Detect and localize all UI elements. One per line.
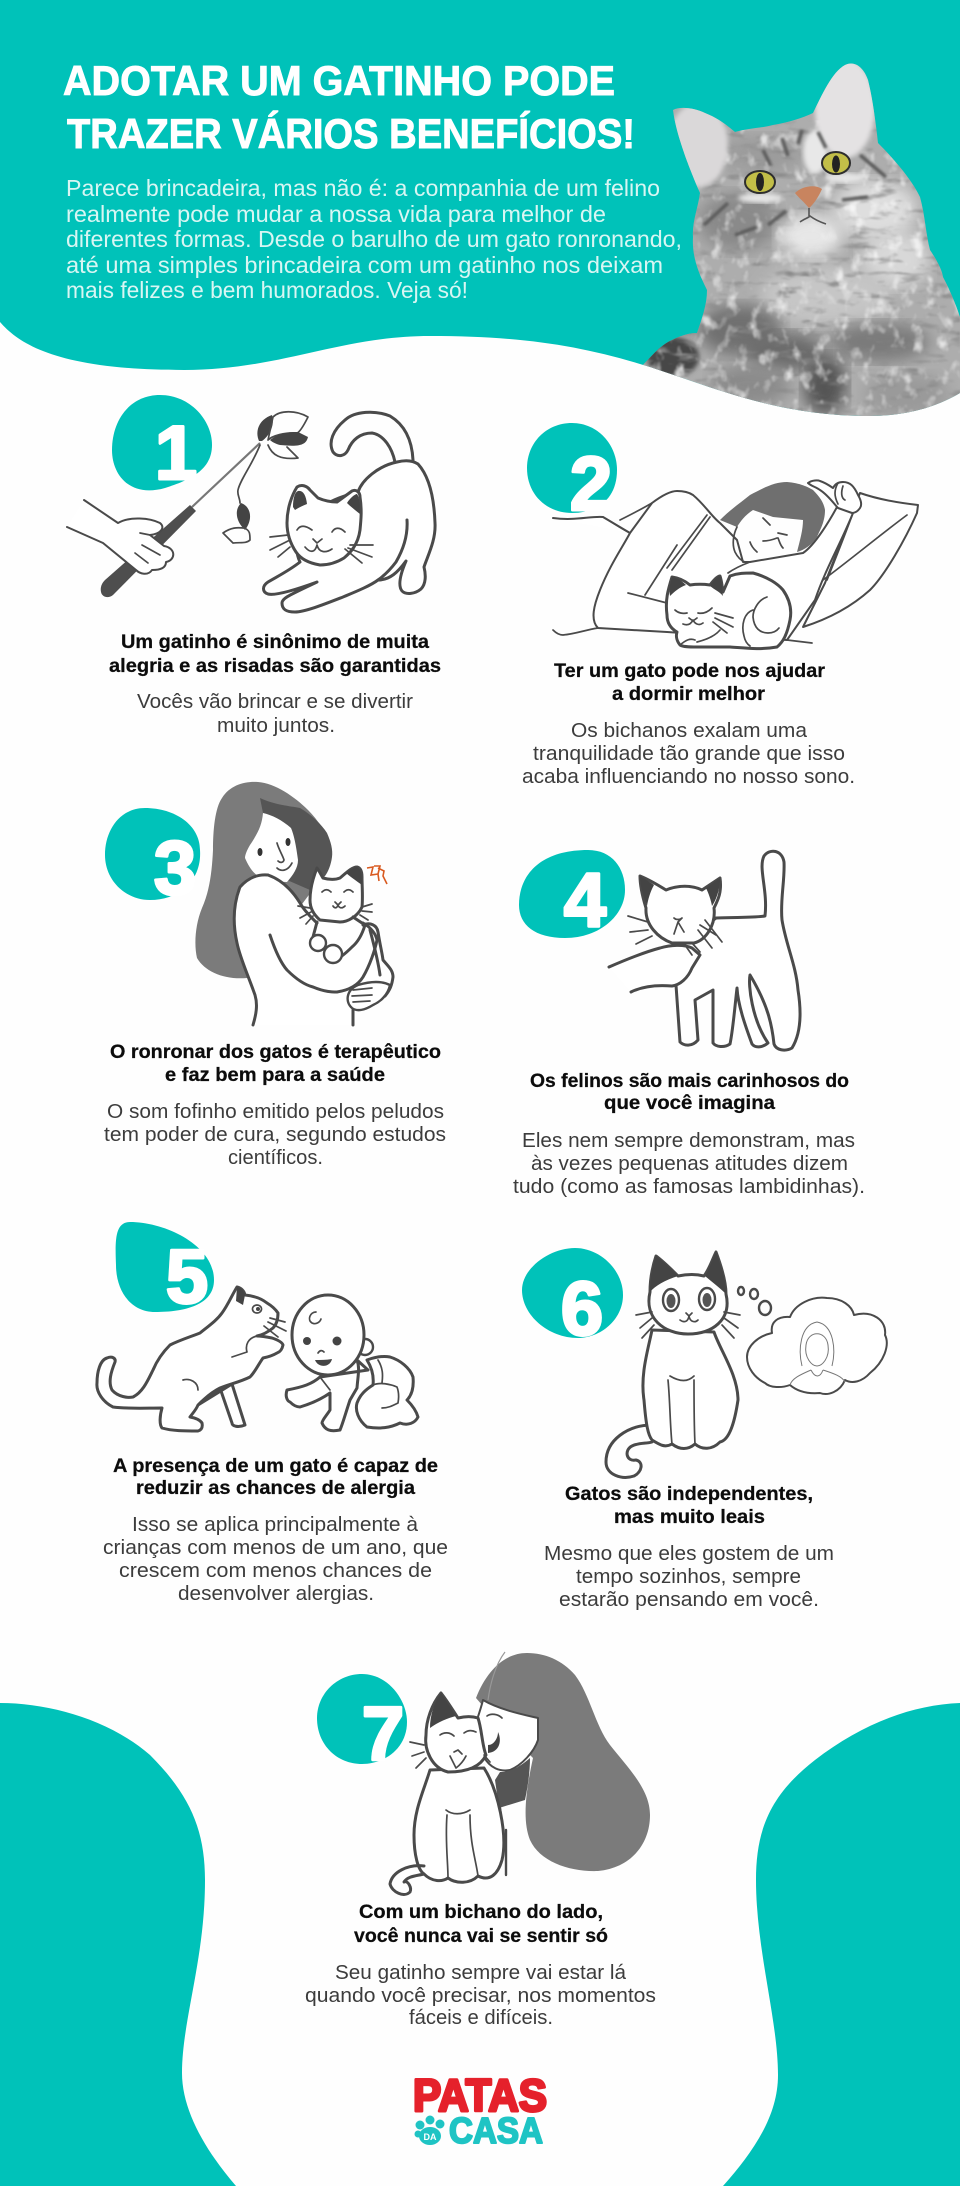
text 5: crianças com menos de um ano, que: [103, 1537, 448, 1559]
heading 4: [530, 1070, 849, 1114]
text 7: Seu gatinho sempre vai estar lá: [335, 1962, 627, 1984]
number blob 3: [105, 808, 200, 911]
body: [234, 875, 392, 1025]
heading 1: [109, 631, 441, 677]
cat body: [264, 461, 435, 612]
text 2: Os bichanos exalam uma: [571, 720, 808, 742]
illustration: hand with feather toy and playing cat: [67, 412, 435, 612]
title: TRAZER VÁRIOS BENEFÍCIOS!: [67, 110, 635, 157]
panel: benefit 2: [522, 423, 918, 788]
sleeping cat: [666, 573, 791, 649]
text 7: [305, 1962, 656, 2029]
long hair: [195, 782, 331, 978]
logo: Patas da Casa: CASA: [449, 2110, 543, 2151]
cat photo: [640, 50, 960, 430]
text 5: desenvolver alergias.: [178, 1583, 374, 1605]
illustration: hand petting cat: [609, 851, 800, 1050]
number blob 5: [116, 1222, 214, 1320]
text 1: Vocês vão brincar e se divertir: [137, 691, 413, 713]
icon: paw: DA: [424, 2132, 437, 2142]
heading 7: você nunca vai se sentir só: [354, 1925, 608, 1947]
intro text: realmente pode mudar a nossa vida para melhor de: [66, 201, 606, 227]
text 3: [104, 1101, 446, 1169]
intro text: [66, 175, 682, 303]
number blob 4: [519, 850, 625, 943]
heading 5: [113, 1455, 438, 1499]
red lines: [367, 866, 387, 884]
heading 4: que você imagina: [604, 1092, 775, 1114]
baby: [286, 1360, 368, 1431]
face: [733, 518, 787, 562]
woman in cloud: [790, 1322, 845, 1385]
text 4: [513, 1130, 865, 1198]
panel: benefit 7: [305, 1652, 656, 2029]
heading 2: a dormir melhor: [612, 683, 765, 705]
text 6: tempo sozinhos, sempre: [576, 1566, 801, 1588]
heading 6: mas muito leais: [614, 1506, 765, 1528]
cat head: [287, 486, 361, 565]
text 6: [544, 1543, 834, 1611]
panel: benefit 3: [104, 782, 446, 1169]
text 6: Mesmo que eles gostem de um: [544, 1543, 834, 1565]
footer side panel left: [0, 1703, 236, 2186]
right arm and hand: [363, 924, 393, 996]
text 1: muito juntos.: [217, 715, 335, 737]
heading 5: A presença de um gato é capaz de: [113, 1455, 438, 1477]
raised arm: [808, 480, 861, 513]
text 3: científicos.: [228, 1147, 323, 1169]
heading 3: [110, 1041, 441, 1086]
text 2: tranquilidade tão grande que isso: [533, 743, 845, 765]
text 5: [103, 1514, 448, 1605]
illustration: woman sleeping with cat: [553, 480, 918, 649]
text 3: O som fofinho emitido pelos peludos: [107, 1101, 444, 1123]
panel: benefit 6: [522, 1248, 887, 1611]
cat tail: [331, 412, 413, 462]
heading 7: Com um bichano do lado,: [359, 1901, 603, 1923]
illustration: woman cuddling cat: [390, 1652, 650, 1894]
face: [245, 813, 298, 882]
heading 1: Um gatinho é sinônimo de muita: [121, 631, 429, 653]
pillow: [803, 493, 918, 627]
heading 6: Gatos são independentes,: [565, 1483, 813, 1505]
illustration: sitting cat thinking of owner: [606, 1252, 887, 1477]
heading 4: Os felinos são mais carinhosos do: [530, 1070, 849, 1092]
text 4: tudo (como as famosas lambidinhas).: [513, 1176, 865, 1198]
heading 3: O ronronar dos gatos é terapêutico: [110, 1041, 441, 1063]
text 5: crescem com menos chances de: [119, 1560, 432, 1582]
title: ADOTAR UM GATINHO PODE: [63, 57, 615, 104]
cat in arms: [310, 867, 362, 922]
heading 2: [554, 660, 825, 705]
text 4: Eles nem sempre demonstram, mas: [522, 1130, 855, 1152]
illustration: woman hugging cat: [195, 782, 393, 1025]
number blob 1: 1: [155, 411, 197, 496]
heading 1: alegria e as risadas são garantidas: [109, 655, 441, 677]
number blob 7: [317, 1674, 407, 1777]
heading 7: [354, 1901, 608, 1947]
panel: benefit 1: [67, 395, 441, 737]
illustration: cat and crawling baby: [97, 1287, 418, 1431]
cat head: [640, 876, 721, 943]
heading 5: reduzir as chances de alergia: [136, 1477, 415, 1499]
arm and body: [553, 491, 853, 640]
number blob 6: 6: [561, 1267, 603, 1352]
logo: Patas da Casa: [413, 2070, 547, 2151]
number blob 1: [112, 395, 212, 496]
panel: benefit 4: [513, 850, 865, 1198]
hand: [609, 945, 700, 992]
title: [63, 57, 635, 157]
text 7: quando você precisar, nos momentos: [305, 1985, 656, 2007]
heading 2: Ter um gato pode nos ajudar: [554, 660, 825, 682]
text 1: [137, 691, 413, 737]
intro text: até uma simples brincadeira com um gatinho nos deixam: [66, 252, 663, 278]
text 2: acaba influenciando no nosso sono.: [522, 766, 855, 788]
logo: Patas da Casa: PATAS: [413, 2070, 547, 2121]
number blob 7: 7: [362, 1692, 404, 1777]
text 2: [522, 720, 855, 788]
heading 6: [565, 1483, 813, 1528]
number blob 6: [522, 1248, 623, 1352]
text 3: tem poder de cura, segundo estudos: [104, 1124, 446, 1146]
text 6: estarão pensando em você.: [559, 1589, 819, 1611]
header wave panel: [0, 0, 960, 416]
text 7: fáceis e difíceis.: [409, 2007, 553, 2029]
cat: [198, 1384, 245, 1426]
number blob 5: 5: [166, 1235, 208, 1320]
heading 3: e faz bem para a saúde: [165, 1064, 385, 1086]
number blob 2: [527, 423, 617, 527]
number blob 3: 3: [154, 826, 196, 911]
cuddled cat: [414, 1768, 504, 1882]
cat eyes: [745, 152, 850, 193]
text 4: às vezes pequenas atitudes dizem: [531, 1153, 848, 1175]
panel: benefit 5: [97, 1222, 448, 1605]
number blob 2: 2: [570, 442, 612, 527]
cat nose: [795, 186, 822, 208]
intro text: diferentes formas. Desde o barulho de um gato ronronando,: [66, 226, 682, 252]
thought bubbles: [738, 1287, 771, 1315]
thought cloud: [747, 1298, 887, 1394]
number blob 4: 4: [564, 858, 606, 943]
intro text: Parece brincadeira, mas não é: a companhia de um felino: [66, 175, 660, 201]
text 5: Isso se aplica principalmente à: [132, 1514, 419, 1536]
intro text: mais felizes e bem humorados. Veja só!: [66, 277, 468, 303]
footer side panel right: [723, 1703, 960, 2186]
hair: [720, 482, 825, 552]
